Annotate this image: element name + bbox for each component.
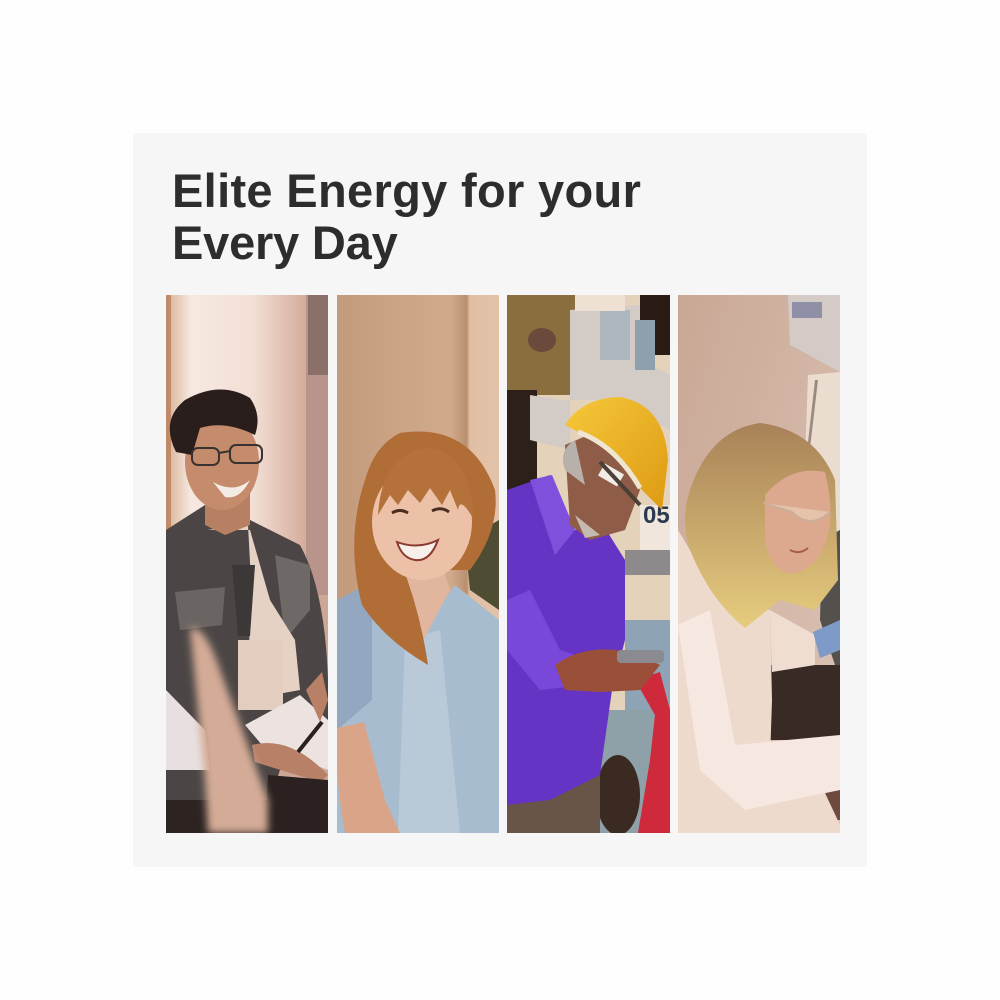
shirt xyxy=(337,582,499,833)
neck xyxy=(406,574,450,640)
face xyxy=(765,471,830,574)
coat xyxy=(678,530,780,833)
safety glasses xyxy=(763,503,830,521)
neck and face xyxy=(205,490,250,535)
hair xyxy=(170,389,258,455)
trousers xyxy=(507,770,600,833)
panel: background card xyxy=(133,133,867,867)
title xyxy=(172,164,641,269)
face xyxy=(372,485,472,580)
glove xyxy=(813,620,840,658)
smile and eyes xyxy=(397,540,438,560)
hard hat xyxy=(565,397,668,510)
arm xyxy=(337,722,400,833)
photo strip xyxy=(166,295,840,833)
blurred foreground object xyxy=(190,628,268,833)
photo 3: worker in purple shirt and yellow hard hat xyxy=(507,295,670,835)
photo 1: smiling man in denim jacket xyxy=(166,295,328,833)
face xyxy=(565,430,640,540)
t-shirt xyxy=(207,525,300,700)
title: Elite Energy for your xyxy=(172,164,641,217)
hair xyxy=(685,423,838,628)
machine number: 05 xyxy=(643,502,670,529)
title: Every Day xyxy=(172,216,398,269)
machinery xyxy=(530,305,670,450)
jacket xyxy=(166,505,328,800)
hair back xyxy=(354,431,496,665)
red machine stand xyxy=(635,672,670,833)
fringe xyxy=(378,464,472,516)
glasses xyxy=(192,445,262,465)
photo 4: scientist in lab coat xyxy=(678,295,840,833)
sleeve, paper and hands xyxy=(166,690,210,770)
arm and hands xyxy=(555,649,660,692)
shirt xyxy=(507,475,625,805)
photo 2: laughing woman in pale blue shirt xyxy=(337,295,499,833)
